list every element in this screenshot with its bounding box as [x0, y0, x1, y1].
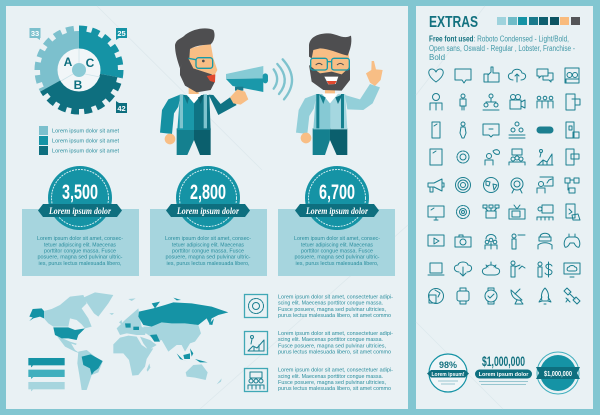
gear letters: A: [64, 55, 73, 69]
icon: network monitor: [483, 205, 499, 218]
value tag 42: [116, 101, 127, 113]
icon: gear target: [456, 206, 470, 218]
body text: [294, 236, 380, 267]
icon: audience screen: [537, 205, 553, 220]
stat card 3: [278, 166, 395, 276]
hair: [309, 33, 351, 58]
icon: video camera: [510, 94, 525, 109]
feature text: scing elit. Maecenas porttitor congue massa.: [278, 374, 383, 380]
eye: [202, 60, 205, 62]
icon: television: [509, 205, 525, 219]
body text: tetuer adipiscing elit. Maecenas: [44, 242, 116, 248]
icon: team board: [509, 149, 525, 165]
icon: megaphone: [428, 179, 444, 192]
icon box: growth chart: [244, 332, 268, 354]
percentage badge: 98%: [439, 360, 457, 370]
collar and neck: [319, 86, 343, 104]
money banner: [475, 353, 532, 384]
ribbon label: Lorem ipsum dolor: [176, 207, 239, 217]
free font note: Free font used: Roboto Condensed - Light/Bold,: [429, 34, 569, 44]
icon: presenter screen: [537, 177, 553, 193]
mouth: [207, 74, 215, 82]
card body: [150, 209, 267, 276]
icon box: gear: [244, 294, 268, 318]
light countries: [113, 298, 222, 384]
collar and neck: [183, 85, 204, 104]
body: [160, 59, 292, 155]
icon grid: [428, 67, 580, 304]
extras heading: EXTRAS: [429, 14, 478, 31]
value tag 42: 42: [117, 104, 126, 113]
gear legend: Lorem ipsum dolor sit amet: [52, 148, 120, 154]
body text: tetuer adipiscing elit. Maecenas: [172, 242, 244, 248]
panel: main left: [6, 6, 408, 409]
icon box: team meeting: [244, 368, 268, 392]
gear segment C: [79, 26, 124, 78]
stat card 2: [150, 166, 267, 276]
megaphone: [226, 66, 268, 92]
body text: ies, purus lectus malesuada libero,: [166, 261, 250, 267]
hand on megaphone: [230, 89, 248, 105]
map legend: [28, 358, 65, 391]
icon: video player: [428, 235, 444, 246]
icon: quote box: [483, 124, 499, 137]
feature row 1: [244, 294, 393, 319]
body text: porttitor congue massa. Fusce: [301, 248, 373, 254]
body text: ies, purus lectus malesuada libero,: [296, 261, 379, 267]
pants: [313, 128, 347, 155]
feature text: Fusce posuere, magna sed pulvinar ultricies,: [278, 380, 387, 386]
shirt: [313, 94, 347, 129]
gear legend: Lorem ipsum dolor sit amet: [52, 128, 120, 134]
icon: thinking head: [485, 150, 500, 165]
body text: Lorem ipsum dolor sit amet, consec-: [165, 236, 251, 242]
icon: person: [460, 94, 466, 110]
face: [310, 48, 350, 83]
feature text: scing elit. Maecenas porttitor congue massa.: [278, 337, 383, 343]
icon: camera: [455, 235, 471, 247]
beard: [309, 64, 350, 91]
gear segment A: [34, 26, 79, 92]
feature text: Lorem ipsum dolor sit amet, consectetuer adipi-: [278, 294, 393, 300]
icon: bullseye: [456, 178, 470, 192]
icon: tablet with hand: [566, 204, 580, 220]
body text: ies, purus lectus malesuada libero,: [38, 261, 122, 267]
gear legend: Lorem ipsum dolor sit amet: [52, 138, 120, 144]
feature text: Fusce posuere, magna sed pulvinar ultricies,: [278, 307, 387, 313]
body text: posuere, magna sed pulvinar ultric-: [294, 254, 380, 260]
feature row 2: [244, 331, 393, 356]
badge: [176, 166, 240, 230]
world map: [28, 292, 228, 391]
body text: porttitor congue massa. Fusce: [172, 248, 244, 254]
icon: growth climber: [537, 150, 553, 165]
icon: cloud upload: [508, 69, 526, 82]
left arm and hand: [296, 94, 317, 143]
icon: team frame: [565, 68, 579, 83]
gear letters: B: [74, 78, 83, 92]
head: [309, 33, 351, 91]
body text: Lorem ipsum dolor sit amet, consec-: [294, 236, 380, 242]
light countries: [44, 292, 114, 390]
icon: phone with bubble: [566, 94, 580, 110]
icon: settings gear: [457, 151, 469, 163]
raised right arm: [345, 84, 380, 110]
body text: tetuer adipiscing elit. Maecenas: [301, 242, 373, 248]
gear hub: [58, 48, 100, 92]
body text: [37, 236, 123, 267]
icon: phone and hand: [566, 122, 579, 138]
sound waves: [274, 59, 292, 99]
feature text: [278, 368, 393, 392]
ribbon label: Lorem ipsum dolor: [48, 207, 111, 217]
value tag 33: 33: [31, 29, 39, 38]
body text: posuere, magna sed pulvinar ultric-: [38, 254, 123, 260]
feature text: Lorem ipsum dolor sit amet, consectetuer adipi-: [278, 331, 393, 337]
colour swatches: [497, 17, 580, 25]
percentage badge: [427, 354, 469, 392]
feature text: scing elit. Maecenas porttitor congue massa.: [278, 300, 383, 306]
glasses: [188, 58, 213, 68]
icon: smartphone: [432, 122, 440, 138]
icon: cloud with people: [482, 262, 500, 275]
icon: satellite dish: [511, 289, 523, 304]
map: Americas: [28, 292, 114, 391]
map: Europe Africa Asia: [113, 298, 228, 384]
icon: monitor: [428, 206, 444, 220]
body text: [165, 236, 251, 267]
face: [188, 43, 217, 78]
head: [175, 28, 217, 92]
man with megaphone: [160, 28, 292, 155]
ribbon: [38, 204, 122, 217]
feature text: purus lectus malesuada libero, sit amet commo: [278, 386, 391, 392]
stat card 1: [22, 166, 139, 276]
money banner: $1,000,000: [482, 353, 525, 369]
man pointing up: [296, 33, 383, 155]
feature row 3: [244, 368, 393, 392]
icon: person with dollar: [538, 262, 552, 277]
value tag 25: 25: [117, 29, 126, 38]
gear legend: [39, 126, 120, 155]
feature text: Lorem ipsum dolor sit amet, consectetuer adipi-: [278, 368, 393, 374]
body text: porttitor congue massa. Fusce: [44, 248, 116, 254]
icon: vr user: [538, 233, 552, 249]
icon: business presenter: [511, 261, 525, 277]
feature text: purus lectus malesuada libero, sit amet commo: [278, 350, 391, 356]
value tag 25: [116, 28, 127, 40]
card body: [278, 209, 395, 276]
panel: extras right: [416, 6, 593, 409]
badge: [48, 166, 112, 230]
feature text: purus lectus malesuada libero, sit amet commo: [278, 313, 391, 319]
icon: thumbs up: [484, 67, 499, 82]
dark countries: [125, 298, 228, 362]
icon: watch with check: [485, 288, 497, 304]
left arm and hand: [160, 94, 181, 144]
icon: target badge: [511, 178, 523, 193]
right arm: [209, 95, 237, 115]
percentage badge: Lorem ipsum!: [431, 372, 465, 378]
icon: woman: [460, 122, 466, 138]
icon: three people: [537, 96, 553, 108]
money seal: $1,000,000: [544, 371, 572, 378]
ribbon: [166, 204, 250, 217]
icon: tablet: [430, 149, 442, 165]
body: [296, 61, 383, 155]
icon: speech box: [455, 69, 471, 83]
gear letters: C: [86, 56, 95, 70]
free font note: [429, 34, 575, 62]
body text: posuere, magna sed pulvinar ultric-: [166, 254, 251, 260]
icon: speaker with bubble: [512, 234, 525, 249]
value tag 33: [30, 28, 40, 40]
icon: laptop: [428, 263, 444, 275]
body text: Lorem ipsum dolor sit amet, consec-: [37, 236, 123, 242]
money seal: [536, 352, 580, 394]
icon: chat: [537, 69, 553, 82]
icon: smart watch: [457, 288, 469, 304]
mouth: [324, 77, 338, 84]
number: 3,500: [62, 181, 98, 204]
gear pie chart: [38, 28, 120, 112]
free font note: Bold: [429, 53, 445, 62]
icon: satellite: [564, 288, 580, 304]
icon: cloud download: [454, 262, 472, 276]
pants: [177, 128, 211, 155]
smiling eyes: [316, 63, 344, 65]
icon: team pyramid: [509, 122, 525, 138]
gear segment B: [40, 74, 123, 114]
ribbon: [295, 204, 379, 217]
icon: flow chart: [565, 178, 579, 193]
icon: globe: [484, 178, 498, 192]
dark countries: [29, 308, 103, 375]
feature text: [278, 331, 393, 356]
ribbon label: Lorem ipsum dolor: [305, 207, 368, 217]
icon: vr headset: [537, 127, 553, 133]
badge: [305, 166, 369, 230]
beard: [180, 58, 215, 92]
icon: monitor with cloud: [564, 263, 580, 277]
money banner: Lorem ipsum dolor: [479, 372, 529, 378]
raised hand: [366, 61, 383, 86]
icon: person with tie: [430, 94, 442, 110]
glasses: [311, 58, 349, 70]
icon: group hierarchy: [483, 94, 499, 110]
gear letters: [64, 55, 95, 92]
hair: [175, 28, 215, 68]
icon: heart: [429, 69, 443, 82]
card body: [22, 209, 139, 276]
suspenders: [316, 94, 344, 128]
icon: phone with card: [566, 149, 579, 165]
number: 6,700: [319, 181, 355, 204]
number: 2,800: [190, 181, 226, 204]
shirt: [177, 95, 211, 130]
icon: game controller: [564, 234, 580, 247]
icon: rocket: [539, 288, 551, 304]
suspenders: [180, 94, 207, 128]
feature text: [278, 294, 393, 319]
icon: team under idea: [485, 234, 497, 249]
icon: globe and card: [428, 288, 444, 304]
feature text: Fusce posuere, magna sed pulvinar ultricies,: [278, 344, 387, 350]
